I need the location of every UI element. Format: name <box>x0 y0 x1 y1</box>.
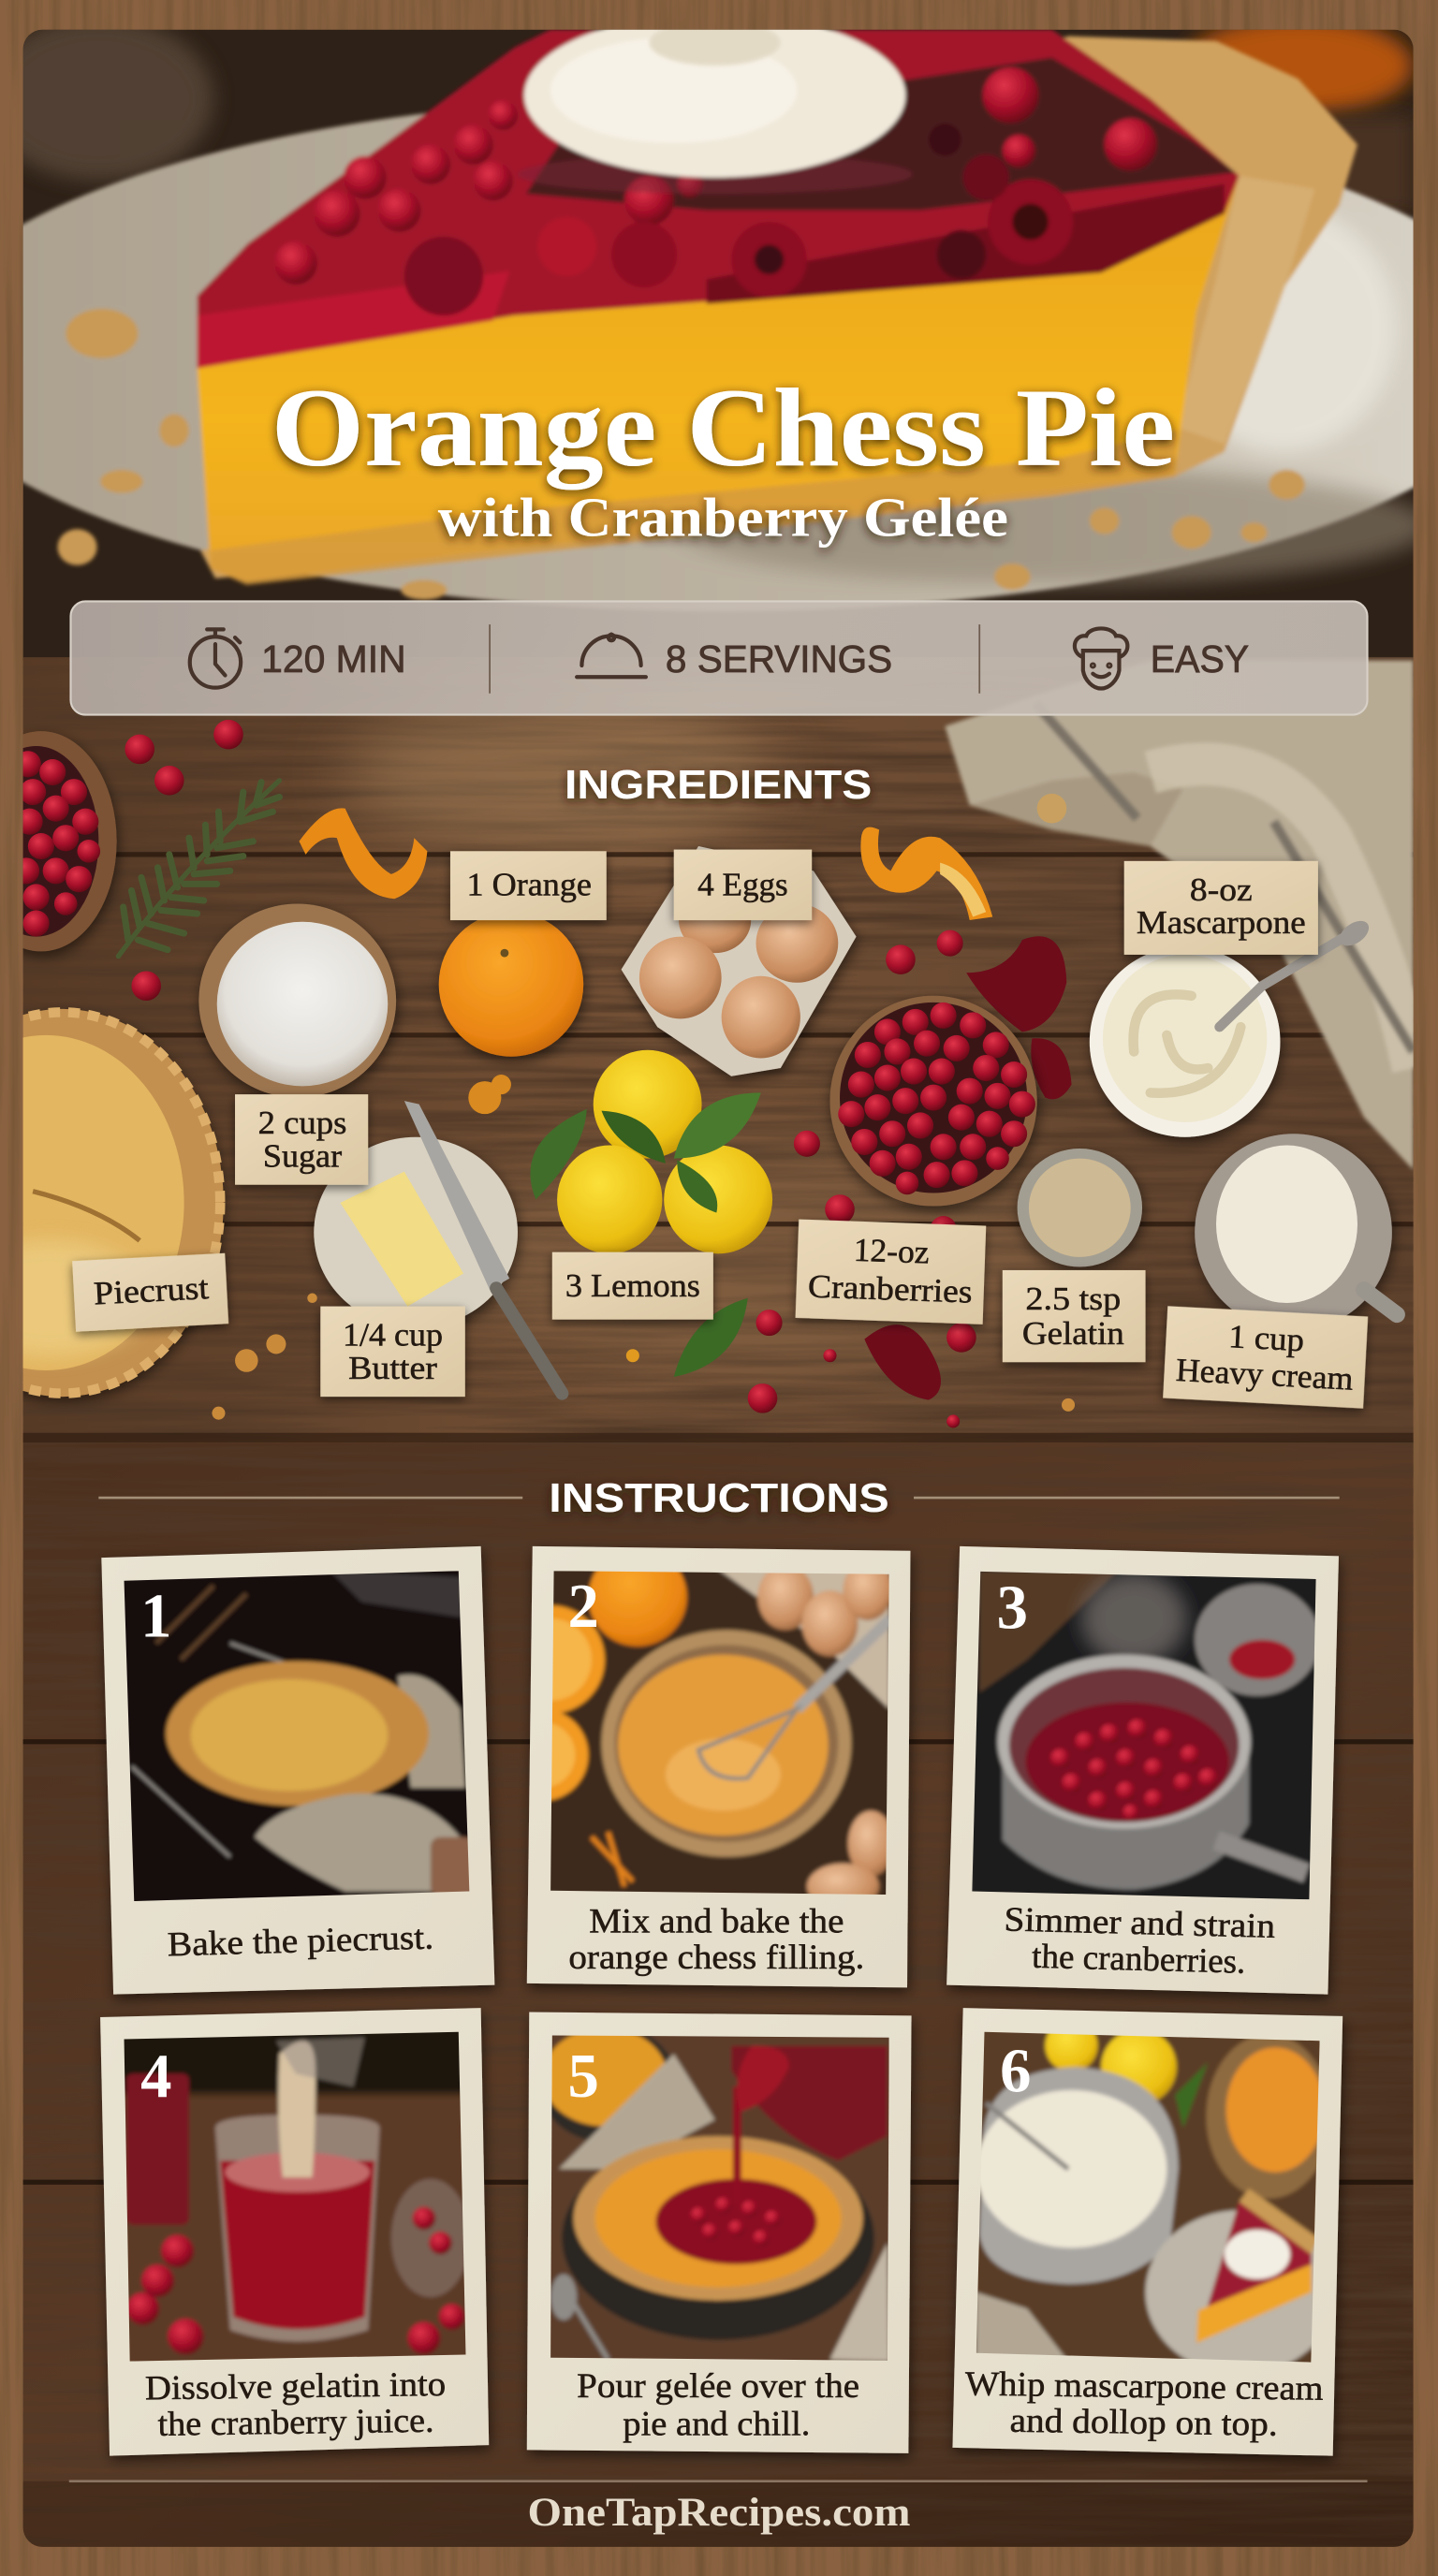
piecrust <box>0 1009 224 1397</box>
heading rules <box>98 1497 1340 1499</box>
loose cranberries <box>125 720 976 1427</box>
label: 2 cups Sugar: 2 cups <box>258 1105 346 1141</box>
subtitle: with Cranberry Gelée <box>438 486 1008 548</box>
step 2 caption: Mix and bake the <box>589 1901 844 1939</box>
step card 3 <box>946 1546 1339 1995</box>
icon: chef <box>1075 628 1127 689</box>
step 1 photo <box>115 1561 477 1906</box>
step 5 caption: pie and chill. <box>623 2405 810 2443</box>
step 6 caption: Whip mascarpone cream <box>965 2364 1324 2408</box>
instructions heading: INSTRUCTIONS <box>549 1475 889 1521</box>
label: Piecrust: Piecrust <box>93 1269 210 1311</box>
step card 2 <box>496 1546 911 1987</box>
ingredients heading: INGREDIENTS <box>565 762 872 808</box>
orange <box>439 912 583 1057</box>
label: 2.5 tsp Gelatin: 2.5 tsp <box>1025 1281 1121 1317</box>
butter plate and knife <box>314 1101 562 1394</box>
step 4 caption <box>145 2364 447 2443</box>
lemons <box>530 1050 772 1377</box>
step 3 photo <box>970 1561 1323 1910</box>
panel: instructions wood <box>23 1442 1414 2547</box>
step 5 caption: Pour gelée over the <box>577 2366 859 2405</box>
label: 2.5 tsp Gelatin <box>1003 1270 1146 1362</box>
cream dollop <box>518 13 912 194</box>
label: 1/4 cup Butter: 1/4 cup <box>343 1317 443 1354</box>
gelatin jar <box>1018 1149 1142 1266</box>
orange peels <box>299 808 992 920</box>
label: 12-oz Cranberries: 12-oz <box>853 1232 930 1271</box>
label: 4 Eggs <box>674 850 812 920</box>
plate crumbs <box>57 309 1305 600</box>
label: 8-oz Mascarpone: Mascarpone <box>1137 904 1306 941</box>
step 3 caption: the cranberries. <box>1032 1937 1246 1981</box>
label: 3 Lemons: 3 Lemons <box>565 1267 700 1304</box>
plate <box>0 95 1438 611</box>
title: Orange Chess Pie <box>271 366 1175 490</box>
step 4 number: 4 <box>140 2042 171 2111</box>
step 6 number: 6 <box>1000 2038 1032 2106</box>
pie slice: cranberry gelée <box>198 30 1240 368</box>
icon: cloche <box>577 635 646 677</box>
cranberry bowl <box>829 996 1037 1206</box>
label: 1/4 cup Butter: Butter <box>348 1350 437 1386</box>
gelée spills <box>864 936 1072 1400</box>
step 2 caption: orange chess filling. <box>568 1938 864 1976</box>
sugar bowl <box>198 903 396 1098</box>
label: 1/4 cup Butter <box>320 1307 465 1397</box>
step 1 number: 1 <box>140 1582 171 1650</box>
label: 1 cup Heavy cream <box>1163 1306 1368 1409</box>
label: 3 Lemons <box>552 1252 713 1320</box>
label: 2 cups Sugar: Sugar <box>263 1137 342 1174</box>
step 5 caption <box>577 2366 859 2443</box>
panel: stats bar <box>70 601 1368 715</box>
step card 4 <box>100 2008 489 2456</box>
crumbs and zest <box>212 794 1075 1420</box>
step 4 caption: the cranberry juice. <box>157 2401 434 2443</box>
pie and plate image <box>0 13 1438 611</box>
step 4 photo <box>115 2021 477 2369</box>
step 3 caption: Simmer and strain <box>1004 1899 1276 1945</box>
pie slice: orange filling <box>198 176 1240 581</box>
mascarpone bowl <box>1090 915 1373 1137</box>
step 2 caption <box>568 1901 864 1976</box>
label: 1 Orange <box>450 851 607 920</box>
label: Piecrust <box>72 1253 228 1332</box>
label: 1 Orange: 1 Orange <box>467 867 592 903</box>
label: 12-oz Cranberries: Cranberries <box>807 1267 973 1310</box>
step 2 number: 2 <box>568 1573 599 1641</box>
heavy cream cup <box>1195 1134 1397 1331</box>
step 3 number: 3 <box>997 1574 1028 1643</box>
pie slice: crust <box>200 37 1357 578</box>
icon: stopwatch <box>190 629 241 688</box>
label: 8-oz Mascarpone <box>1124 861 1318 955</box>
panel: ingredients wood <box>23 657 1414 1442</box>
label: 12-oz Cranberries <box>796 1220 986 1325</box>
step card 6 <box>952 2008 1343 2456</box>
footer rule <box>69 2481 1368 2482</box>
label: 1 cup Heavy cream: 1 cup <box>1227 1318 1305 1358</box>
label: 1 cup Heavy cream: Heavy cream <box>1175 1352 1354 1398</box>
stat: 120 MIN: 120 MIN <box>261 637 406 681</box>
label: 2 cups Sugar <box>235 1094 368 1185</box>
dividers <box>490 624 979 694</box>
step 6 photo <box>970 2019 1336 2375</box>
label: 4 Eggs: 4 Eggs <box>697 867 788 903</box>
cranberries in gelée <box>274 67 1157 315</box>
stat: 8 SERVINGS: 8 SERVINGS <box>666 637 892 681</box>
step 5 photo <box>539 2025 896 2366</box>
step card 1 <box>101 1546 494 1995</box>
title <box>271 366 1175 548</box>
step 4 caption: Dissolve gelatin into <box>145 2364 446 2407</box>
label: 8-oz Mascarpone: 8-oz <box>1190 871 1253 908</box>
egg carton <box>622 846 857 1076</box>
footer website: OneTapRecipes.com <box>527 2490 911 2535</box>
cranberry bowl left <box>0 731 117 951</box>
rosemary <box>118 781 279 957</box>
stat: EASY: EASY <box>1151 637 1249 681</box>
towel <box>945 661 1414 1170</box>
label: 2.5 tsp Gelatin: Gelatin <box>1022 1315 1124 1352</box>
step 6 caption: and dollop on top. <box>1009 2401 1278 2443</box>
step 3 caption <box>1003 1899 1276 1982</box>
step 6 caption <box>964 2364 1324 2443</box>
step 2 photo <box>496 1548 896 1910</box>
panel: hero photo <box>0 13 1438 661</box>
step card 5 <box>527 2012 912 2453</box>
step 5 number: 5 <box>568 2042 599 2111</box>
step 1 caption: Bake the piecrust. <box>167 1918 434 1963</box>
